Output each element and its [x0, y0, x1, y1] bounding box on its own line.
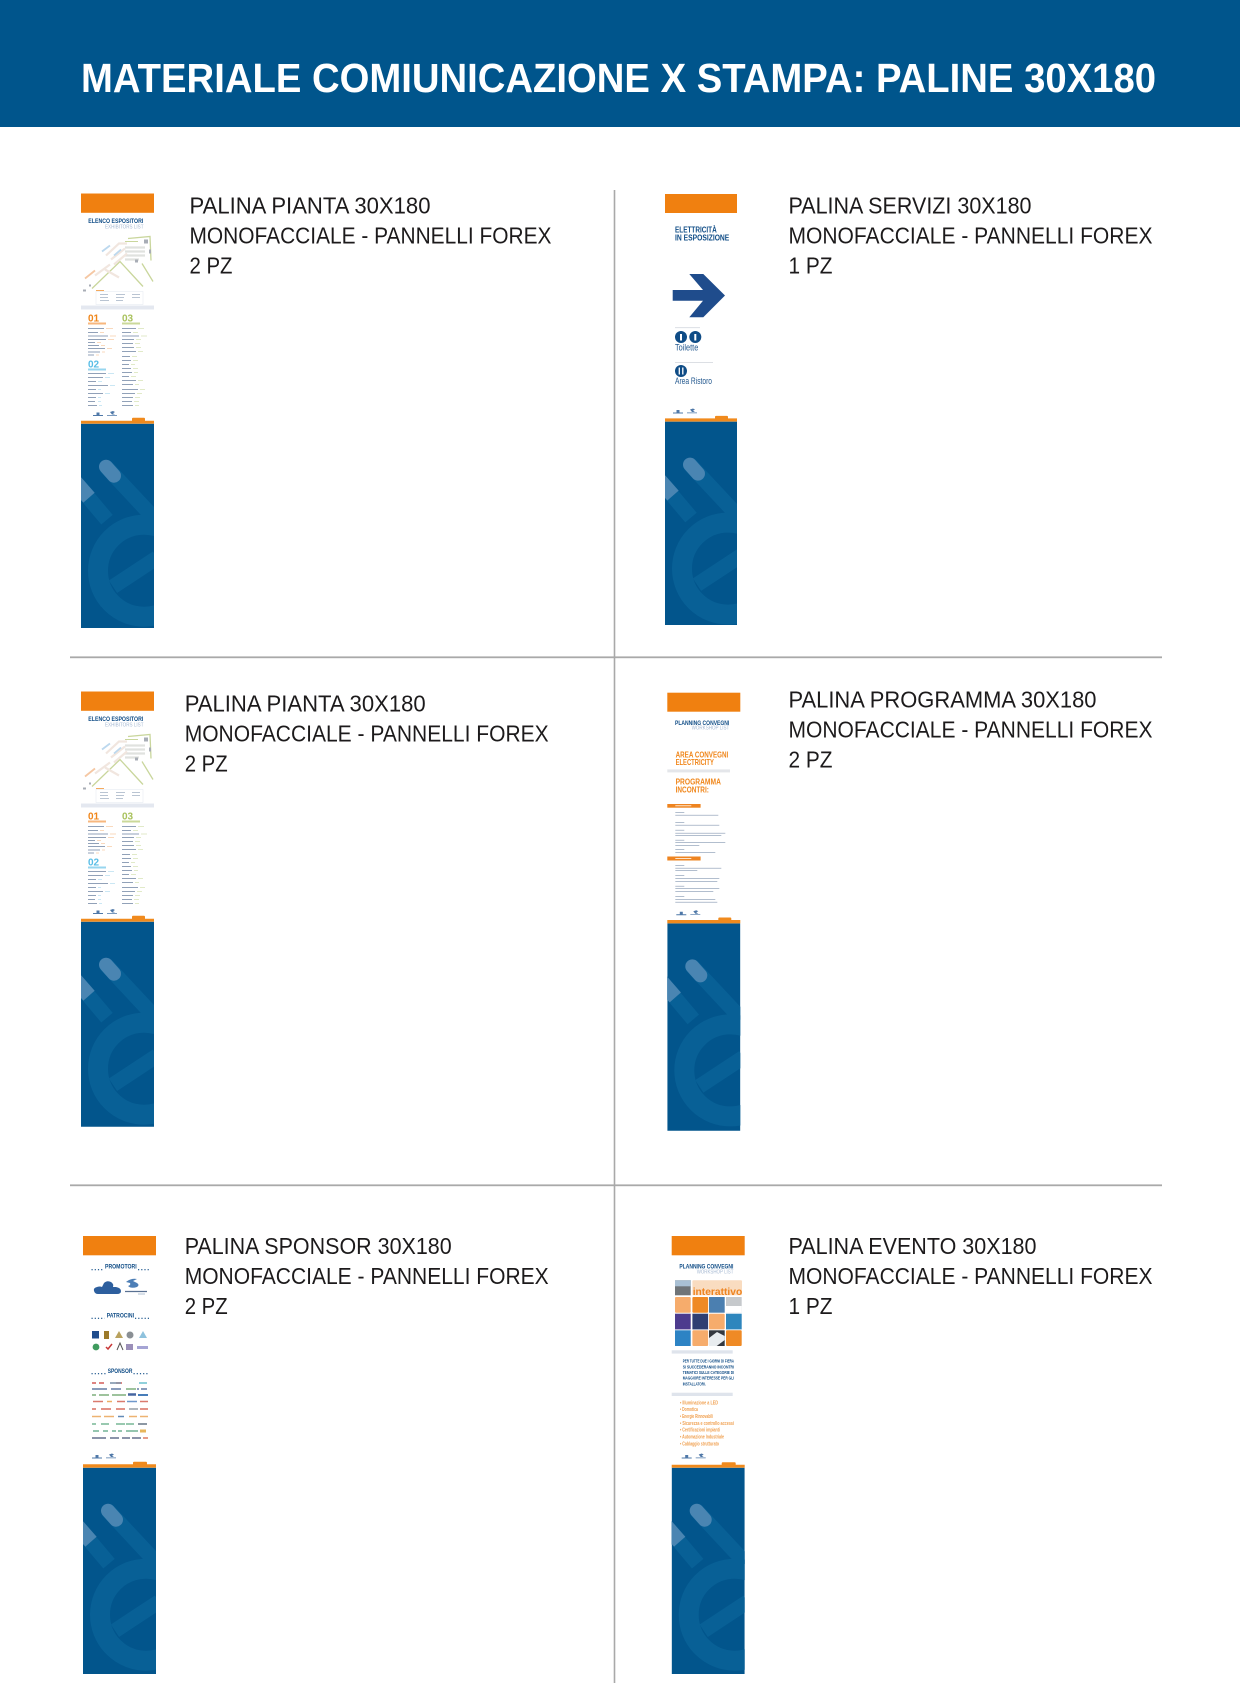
topic list: • Cablaggio strutturato	[680, 1442, 719, 1448]
icon: toilets	[675, 331, 701, 343]
text: palina servizi: 1 PZ	[788, 252, 833, 278]
topic list: • Certificazioni impianti	[680, 1428, 720, 1434]
description text	[683, 1359, 734, 1386]
text: palina sponsor: PALINA SPONSOR 30X180	[185, 1233, 452, 1259]
text: palina evento: 1 PZ	[788, 1293, 833, 1319]
panel: palina pianta middle	[75, 692, 190, 1132]
exhibitor numbers: 02	[88, 360, 100, 370]
header band	[0, 0, 1240, 127]
heading: elenco espositori: ELENCO ESPOSITORI	[88, 218, 143, 225]
description text: INSTALLATORI.	[683, 1381, 706, 1386]
text: palina servizi	[788, 192, 1152, 278]
exhibitor list rows	[88, 328, 147, 406]
exhibitor list rows	[88, 826, 147, 904]
text: palina pianta middle: PALINA PIANTA 30X180	[185, 690, 426, 716]
exhibitor numbers: 01	[88, 314, 100, 324]
programme day 1	[667, 804, 725, 853]
heading: patrocini	[92, 1313, 149, 1320]
text: palina evento	[788, 1233, 1152, 1319]
exhibitor numbers: 01	[88, 812, 100, 822]
text: palina pianta middle	[185, 690, 549, 776]
exhibitor numbers	[88, 314, 140, 370]
text: palina sponsor: 2 PZ	[185, 1293, 228, 1319]
upper horizontal divider	[70, 656, 1162, 658]
blue base	[661, 923, 776, 1133]
patronage logos	[92, 1331, 148, 1350]
lower horizontal divider	[70, 1184, 1162, 1186]
text: palina pianta: 2 PZ	[190, 252, 233, 278]
panel: palina servizi	[659, 194, 774, 632]
text: palina servizi: MONOFACCIALE - PANNELLI FOREX	[788, 222, 1152, 248]
topic list: • Energie Rinnovabili	[680, 1414, 713, 1420]
image grid: interattivo	[693, 1287, 742, 1298]
logos	[682, 1454, 706, 1458]
orange strip	[81, 418, 154, 424]
topic list	[680, 1400, 734, 1448]
panel: palina sponsor	[77, 1236, 192, 1678]
panel: palina servizi: IN ESPOSIZIONE	[675, 233, 730, 242]
floor plan map	[81, 734, 154, 808]
text: palina pianta: PALINA PIANTA 30X180	[190, 192, 430, 218]
panel: palina pianta top	[75, 194, 190, 634]
topic list: • Automazione Industriale	[680, 1435, 724, 1441]
heading: programma incontri: PROGRAMMA	[676, 776, 721, 786]
description text: MAGGIORE INTERESSE PER GLI	[683, 1376, 734, 1381]
panel: palina pianta middle: EXHIBITORS LIST	[105, 722, 144, 728]
blue base	[77, 1468, 192, 1678]
heading: elettricita: ELETTRICITÀ	[675, 225, 717, 234]
panel: palina pianta top: EXHIBITORS LIST	[105, 224, 144, 230]
exhibitor numbers: 03	[122, 812, 134, 822]
floor plan map	[81, 236, 154, 310]
blue base	[666, 1468, 781, 1678]
panel: palina evento: WORKSHOP LIST	[697, 1269, 733, 1275]
image grid	[675, 1280, 742, 1346]
orange strip	[83, 1462, 156, 1468]
description text: SI SUCCEDERANNO INCONTRI	[683, 1364, 734, 1369]
text: palina pianta: MONOFACCIALE - PANNELLI FOREX	[190, 222, 552, 248]
promoter logos	[94, 1279, 147, 1294]
orange strip	[81, 916, 154, 922]
orange strip	[665, 416, 737, 422]
orange strip	[672, 1462, 745, 1468]
heading: area convegni: AREA CONVEGNI	[676, 749, 728, 759]
blue base	[75, 424, 190, 634]
panel: palina programma: INCONTRI:	[676, 784, 709, 794]
description text: PER TUTTE DUE I GIORNI DI FIERA	[683, 1359, 734, 1364]
blue base	[659, 422, 774, 632]
text: palina programma: 2 PZ	[788, 746, 833, 772]
heading: patrocini: PATROCINI	[107, 1313, 134, 1320]
text: palina sponsor	[185, 1233, 549, 1319]
logos	[673, 408, 697, 414]
heading: promotori: PROMOTORI	[105, 1263, 137, 1270]
label: area ristoro: Area Ristoro	[675, 376, 712, 387]
topic list: • Domotica	[680, 1407, 698, 1413]
panel: palina programma	[661, 693, 776, 1133]
text: palina sponsor: MONOFACCIALE - PANNELLI FOREX	[185, 1263, 549, 1289]
text: palina evento: PALINA EVENTO 30X180	[788, 1233, 1036, 1259]
heading: sponsor	[92, 1368, 148, 1375]
description text: TEMATICI SULLE CATEGORIE DI	[683, 1370, 734, 1375]
logos	[93, 411, 117, 416]
text: palina pianta middle: 2 PZ	[185, 750, 228, 776]
blue base	[75, 922, 190, 1132]
text: palina programma	[788, 686, 1152, 772]
exhibitor numbers: 03	[122, 314, 134, 324]
panel: palina programma: ELECTRICITY	[676, 757, 714, 767]
heading: planning convegni: PLANNING CONVEGNI	[675, 720, 729, 727]
heading: sponsor: SPONSOR	[108, 1368, 132, 1375]
exhibitor numbers	[88, 812, 140, 868]
title: MATERIALE COMIUNICAZIONE X STAMPA: PALINE 30X180	[81, 55, 1156, 101]
orange strip	[667, 918, 740, 923]
icon: restaurant	[675, 365, 687, 377]
heading: elenco espositori: ELENCO ESPOSITORI	[88, 716, 143, 723]
logos	[92, 1454, 116, 1458]
logos	[93, 909, 117, 914]
sponsor logos	[92, 1383, 148, 1438]
label: toilette: Toilette	[675, 343, 698, 354]
text: palina pianta middle: MONOFACCIALE - PANNELLI FOREX	[185, 720, 549, 746]
text: palina servizi: PALINA SERVIZI 30X180	[788, 192, 1032, 218]
programme day 2	[667, 856, 721, 902]
logos	[676, 910, 700, 915]
exhibitor numbers: 02	[88, 858, 100, 868]
panel: palina programma: WORKSHOP LIST	[692, 725, 729, 731]
panel: palina evento	[666, 1236, 781, 1678]
text: palina programma: PALINA PROGRAMMA 30X180	[788, 686, 1096, 712]
text: palina programma: MONOFACCIALE - PANNELLI FOREX	[788, 716, 1152, 742]
heading: planning convegni: PLANNING CONVEGNI	[679, 1264, 733, 1271]
icon: arrow	[673, 274, 725, 317]
text: palina pianta	[190, 192, 552, 278]
topic list: • Sicurezza e controllo accessi	[680, 1421, 734, 1427]
text: palina evento: MONOFACCIALE - PANNELLI FOREX	[788, 1263, 1152, 1289]
topic list: • Illuminazione a LED	[680, 1400, 718, 1406]
vertical divider	[614, 190, 615, 1683]
